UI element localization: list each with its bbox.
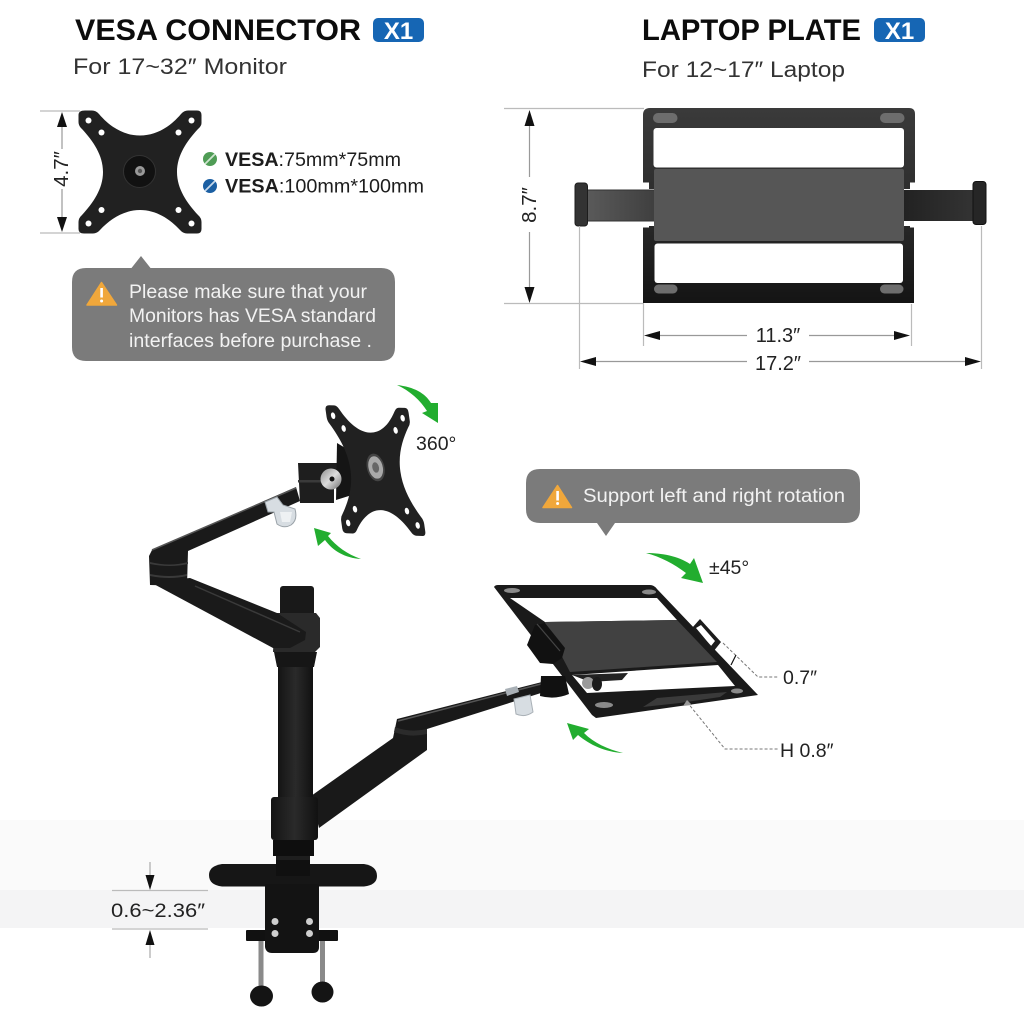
callout: check VESA interface (72, 256, 395, 361)
screw rods (258, 940, 264, 986)
dimension: desk thickness (111, 862, 208, 958)
label: plus minus 45 degrees: ±45° (709, 557, 749, 579)
callout: check VESA interface: interfaces before purchase . (129, 331, 372, 352)
clamp bracket (265, 884, 319, 953)
plate frame (643, 108, 915, 303)
callout: left and right rotation (526, 469, 860, 536)
clear cable clip (265, 497, 296, 527)
right clamp handle (692, 619, 721, 652)
clamp crossbar (246, 930, 338, 941)
swivel base (540, 676, 569, 698)
dimension: 0.7 inch thickness: 0.7″ (783, 667, 817, 689)
VESA size legend (203, 149, 424, 198)
tray front bar highlight (643, 692, 727, 707)
mount: lower laptop arm (311, 682, 543, 828)
heading: VESA connector: VESA CONNECTOR (75, 14, 361, 47)
mount: upper monitor arm (149, 443, 352, 648)
icon: laptop plate top view (575, 108, 986, 303)
subheading: laptop size: For 12~17″ Laptop (642, 57, 845, 82)
dimension: H 0.8 inch (683, 700, 834, 762)
head joint (298, 443, 352, 503)
heading: laptop plate: X1 (885, 18, 914, 45)
heading: VESA connector: X1 (384, 18, 413, 45)
underside bracket (572, 673, 628, 682)
center pad (654, 169, 904, 241)
clamp base (209, 860, 377, 1006)
arrow: tilt bottom (567, 723, 623, 753)
left clamp (575, 183, 588, 226)
dimension: 0.7 inch thickness (723, 643, 817, 689)
VESA size legend: VESA:100mm*100mm (225, 176, 424, 198)
left side arm (587, 190, 655, 221)
dimension: 8.7 inch height (504, 108, 644, 304)
icon: tilted monitor plate (325, 405, 426, 536)
icon: green screw (203, 152, 217, 166)
arrow: rotation lower left (314, 528, 361, 559)
base disk (209, 864, 377, 886)
icon: blue screw (203, 179, 217, 193)
plate windows (654, 128, 904, 168)
rubber pads (653, 113, 904, 294)
dimension: desk thickness: 0.6~2.36″ (111, 900, 205, 922)
label: 360 degrees: 360° (416, 433, 456, 455)
arrow: tilt top (646, 553, 703, 583)
VESA size legend: VESA:75mm*75mm (225, 149, 401, 171)
right clamp (973, 182, 986, 224)
dimension: 4.7 inch height (40, 111, 80, 233)
callout: check VESA interface: Monitors has VESA standard (129, 306, 376, 327)
tray rubber pads (504, 588, 743, 708)
column foot (276, 860, 310, 876)
dimension: 11.3 and 17.2 inch widths: 17.2″ (755, 353, 801, 375)
heading: laptop plate: LAPTOP PLATE (642, 14, 861, 47)
icon: tilted laptop tray (494, 585, 758, 718)
bracket bolts (272, 918, 313, 937)
desk surface background (0, 820, 1024, 928)
dimension: 4.7 inch height: 4.7″ (50, 151, 73, 187)
dimension: H 0.8 inch: H 0.8″ (780, 740, 834, 762)
icon: warning triangle (87, 282, 116, 305)
arrow: rotation top right (397, 385, 438, 423)
clear cable clip (505, 686, 533, 716)
dimension: 11.3 and 17.2 inch widths (580, 226, 982, 375)
icon: VESA connector plate (78, 110, 202, 234)
subheading: monitor size: For 17~32″ Monitor (73, 54, 288, 79)
left clamp block (527, 623, 565, 664)
dimension: 11.3 and 17.2 inch widths: 11.3″ (756, 325, 800, 347)
tray pad (545, 620, 717, 672)
clamp knobs (250, 986, 273, 1006)
icon: warning triangle (543, 486, 572, 508)
callout: left and right rotation: Support left and right rotation (583, 486, 845, 507)
mount: center column (271, 586, 320, 870)
dimension: 8.7 inch height: 8.7″ (518, 187, 541, 223)
callout: check VESA interface: Please make sure that your (129, 282, 368, 303)
right side arm (903, 190, 973, 221)
tray frame (494, 585, 758, 718)
